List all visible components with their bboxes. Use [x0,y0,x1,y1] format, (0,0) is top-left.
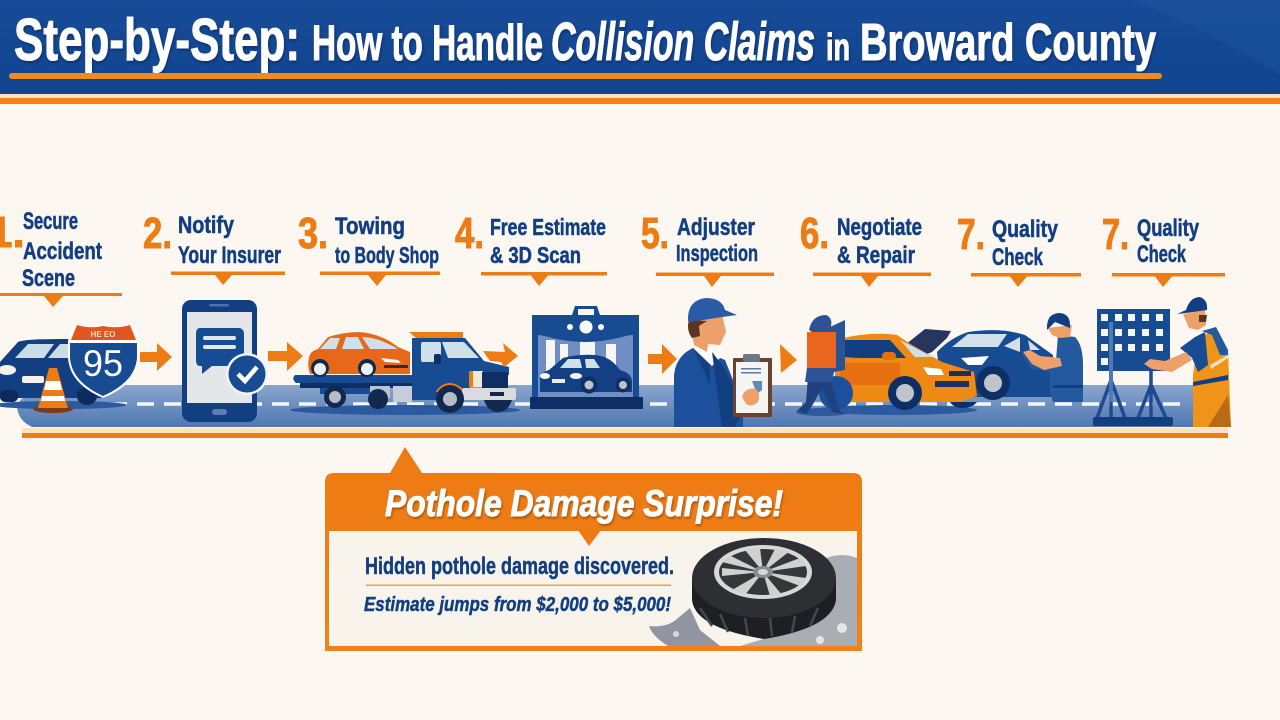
title: How to Handle [312,15,543,71]
icon: worker at car door [1022,313,1083,402]
icon: smartphone with message [182,300,268,422]
step 4 label: & 3D Scan [490,242,581,268]
icon: crashed car, highway shield and cone [0,324,139,413]
scanned car [540,355,632,394]
clipboard [733,354,772,417]
icon: check badge [226,353,268,395]
step 2 label [143,209,285,285]
step 1 label: Secure [23,208,78,235]
step 7 repeat label: 7. [1102,210,1129,259]
step 2 label: Your Insurer [178,242,281,269]
orange car on bed [308,332,410,377]
icon: 3D scan frame with car [530,306,643,409]
step 4 label: 4. [455,209,484,258]
step 1 label: Scene [22,265,75,292]
step 5 label: 5. [641,209,669,258]
icon: interstate 95 shield: 95 [83,343,123,384]
icon: traffic cone [33,368,73,413]
step 1 label: Accident [23,238,102,265]
step 2 label: 2. [143,209,172,258]
icon: repair worker, orange car and blue car [796,315,1053,416]
step 5 label: Inspection [676,240,758,266]
title: Step-by-Step: [14,7,300,73]
road band [17,385,1228,438]
step 4 label [455,209,607,286]
icon: tow truck with orange car [290,332,520,415]
callout text [364,553,674,616]
step 3 label [298,209,440,286]
callout text: Estimate jumps from $2,000 to $5,000! [364,594,671,616]
step 7 label: 7. [957,210,985,259]
callout heading: Pothole Damage Surprise! [385,483,783,524]
step 6 label: 6. [800,209,829,258]
step 7 label: Quality [992,216,1059,243]
technician [1144,297,1231,427]
step 7 repeat label [1102,210,1225,287]
arrow 3 [483,343,518,367]
title: Collision Claims [551,12,815,72]
arrow 4 [648,344,677,374]
icon: tire in pothole [649,538,857,646]
blue car [937,330,1053,400]
step 5 label: Adjuster [677,214,755,241]
step 7 label: Check [992,244,1043,271]
orange car [819,334,977,410]
step 3 label: 3. [298,209,328,258]
worker with orange panel [796,315,850,416]
callout text: Hidden pothole damage discovered. [365,553,674,580]
step 4 label: Free Estimate [490,214,606,240]
step 6 label [800,209,931,287]
step 1 label [0,208,122,307]
arrow 2 [268,342,303,371]
header banner [0,0,1280,104]
icon: interstate 95 shield: HE EO [91,330,115,339]
title underline [9,73,1162,79]
wheels [324,385,512,413]
title: Broward County [860,14,1156,72]
icon: adjuster with clipboard [674,298,772,427]
arrow 1 [140,343,172,371]
title [14,7,1156,73]
step 2 label: Notify [178,212,235,239]
icon: interstate 95 shield [68,324,139,398]
step 7 repeat label: Quality [1137,215,1199,242]
title: in [826,27,850,69]
step 7 label [957,210,1081,287]
step 6 label: Negotiate [837,214,922,241]
flatbed [293,375,412,402]
step 5 label [641,209,774,287]
step 7 repeat label: Check [1137,241,1186,268]
step 6 label: & Repair [837,242,915,269]
step 3 label: Towing [335,213,405,240]
arrow 5 [780,344,797,373]
stand [1097,322,1166,420]
icon: calibration board and technician [1093,297,1231,427]
step 3 label: to Body Shop [335,242,439,268]
truck cab [409,332,516,400]
callout: pothole damage surprise [325,447,862,651]
